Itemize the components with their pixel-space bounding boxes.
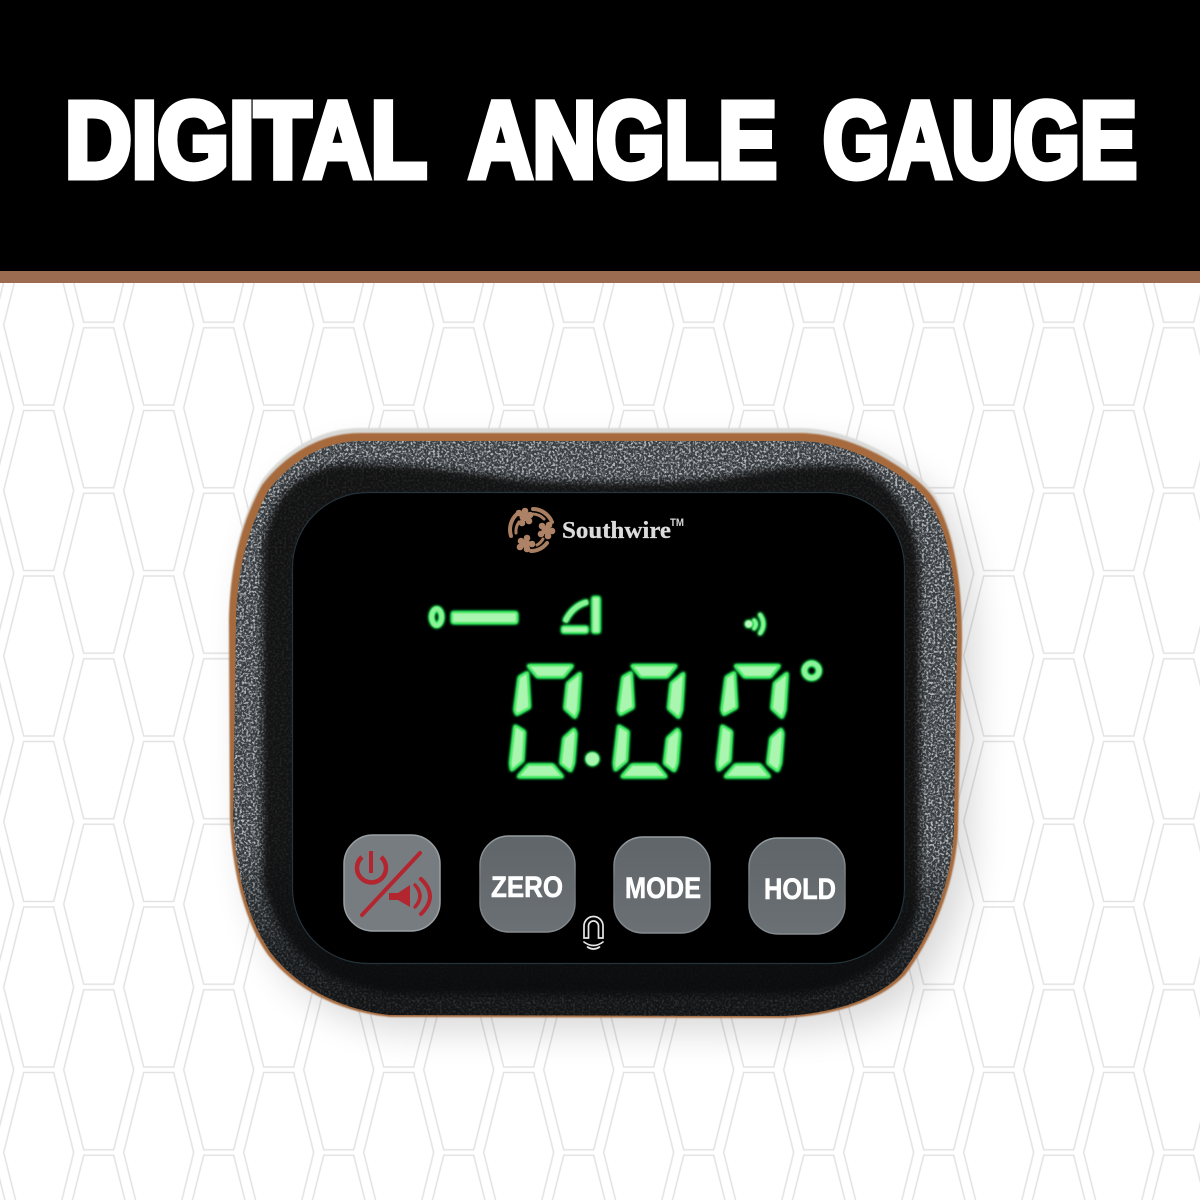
button: MODE [614,837,710,933]
reference zero indicator [432,609,442,625]
sound on icon [745,615,763,633]
decimal point [586,753,599,765]
button: HOLD [749,838,845,934]
display glass [292,492,904,964]
title: ANGLE [469,79,777,200]
degree symbol [804,663,819,678]
button: MODE: MODE [625,872,701,905]
icon: magnet [584,916,603,949]
title: DIGITAL [65,79,427,200]
copper housing edge [229,433,962,1018]
logo emblem [510,508,555,552]
power and speaker icons [357,851,430,915]
level bar indicator [452,613,517,623]
LED readout [432,597,819,777]
button: HOLD: HOLD [764,873,836,906]
digit: 0 [718,666,787,777]
trademark: TM [670,517,684,529]
digit: 0 [511,666,580,777]
button: ZERO [480,836,575,932]
digit: 0 [614,666,684,777]
background hexagon pattern [0,283,1200,1200]
logo wordmark: Southwire [562,518,671,544]
device: digital angle gauge [225,428,976,1032]
angle mode icon [562,597,599,632]
device drop shadow [243,447,976,1032]
title banner [0,0,1200,283]
Southwire logo [510,508,684,552]
button: power and sound [344,835,440,931]
title [65,79,1137,200]
pale top edge of the housing [229,428,962,1013]
textured rubber bumper [225,430,970,1025]
copper divider band [0,271,1200,283]
button: ZERO: ZERO [491,871,563,904]
